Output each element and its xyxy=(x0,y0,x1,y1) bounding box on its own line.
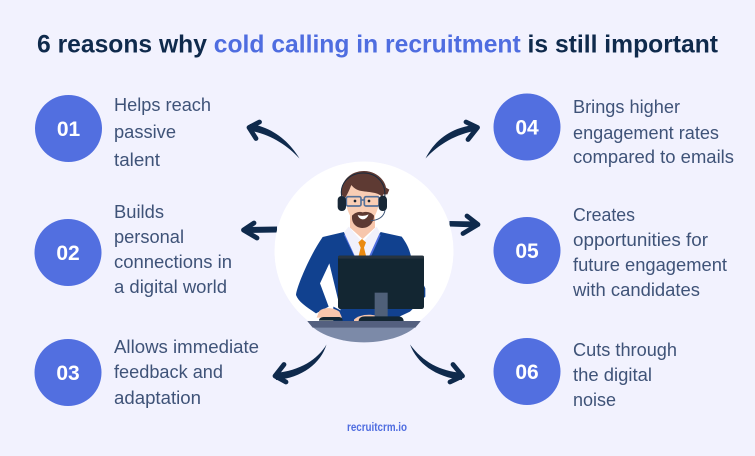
number badge 06: 06 xyxy=(515,361,539,384)
reason 05 xyxy=(494,205,727,300)
arrow to reason 06 xyxy=(410,344,462,382)
number badge 05: 05 xyxy=(515,240,539,263)
text 03: Allows immediate xyxy=(114,337,259,357)
text 03: adaptation xyxy=(114,388,201,408)
text 06: the digital xyxy=(573,365,652,385)
number badge 03 xyxy=(34,339,102,406)
arrow to reason 02 xyxy=(244,223,277,238)
number badge 01: 01 xyxy=(57,118,80,141)
number badge 02: 02 xyxy=(56,242,80,265)
reason 01 xyxy=(35,95,211,170)
reason 06 xyxy=(494,338,677,410)
footer website: recruitcrm.io xyxy=(347,422,407,434)
number badge 04: 04 xyxy=(515,116,539,140)
text 02: Builds xyxy=(114,202,164,222)
title: 6 reasons why cold calling in recruitment is still important xyxy=(37,30,719,58)
desk xyxy=(307,321,421,342)
monitor xyxy=(338,256,424,321)
number badge 04 xyxy=(494,94,560,160)
text 06: noise xyxy=(573,390,616,410)
text 05 xyxy=(572,205,727,300)
text 01 xyxy=(114,95,211,170)
text 04: Brings higher xyxy=(573,97,680,117)
text 03: feedback and xyxy=(114,362,223,382)
text 05: future engagement xyxy=(573,255,727,275)
text 04 xyxy=(573,97,734,167)
text 03 xyxy=(114,337,259,408)
head and hair xyxy=(341,171,389,228)
arrow to reason 04 xyxy=(426,122,478,158)
text 04: engagement rates xyxy=(573,123,719,143)
text 02 xyxy=(114,202,232,297)
number badge 03: 03 xyxy=(56,362,80,385)
number badge 05 xyxy=(494,217,560,284)
central illustration: recruiter at computer xyxy=(274,162,454,342)
text 01: Helps reach xyxy=(114,95,211,115)
arrow to reason 01 xyxy=(249,122,300,158)
text 01: passive xyxy=(114,122,176,142)
white circle backdrop xyxy=(274,162,454,340)
text 05: Creates xyxy=(573,205,635,225)
reason 04 xyxy=(494,94,734,167)
number badge 02 xyxy=(34,219,102,286)
text 05: with candidates xyxy=(572,280,700,300)
headset xyxy=(338,173,387,221)
number badge 01 xyxy=(35,95,102,162)
arrow to reason 03 xyxy=(275,344,326,382)
text 01: talent xyxy=(114,150,160,170)
text 04: compared to emails xyxy=(573,147,734,167)
text 06 xyxy=(573,340,677,410)
reason 02 xyxy=(34,202,232,297)
text 06: Cuts through xyxy=(573,340,677,360)
glasses xyxy=(346,197,379,206)
recruiter body xyxy=(296,215,425,321)
number badge 06 xyxy=(494,338,560,405)
arrow to reason 05 xyxy=(450,216,478,234)
text 02: connections in xyxy=(114,252,232,272)
mouse xyxy=(319,317,343,321)
text 02: personal xyxy=(114,227,184,247)
text 05: opportunities for xyxy=(573,230,708,250)
reason 03 xyxy=(34,337,259,408)
text 02: a digital world xyxy=(114,277,227,297)
